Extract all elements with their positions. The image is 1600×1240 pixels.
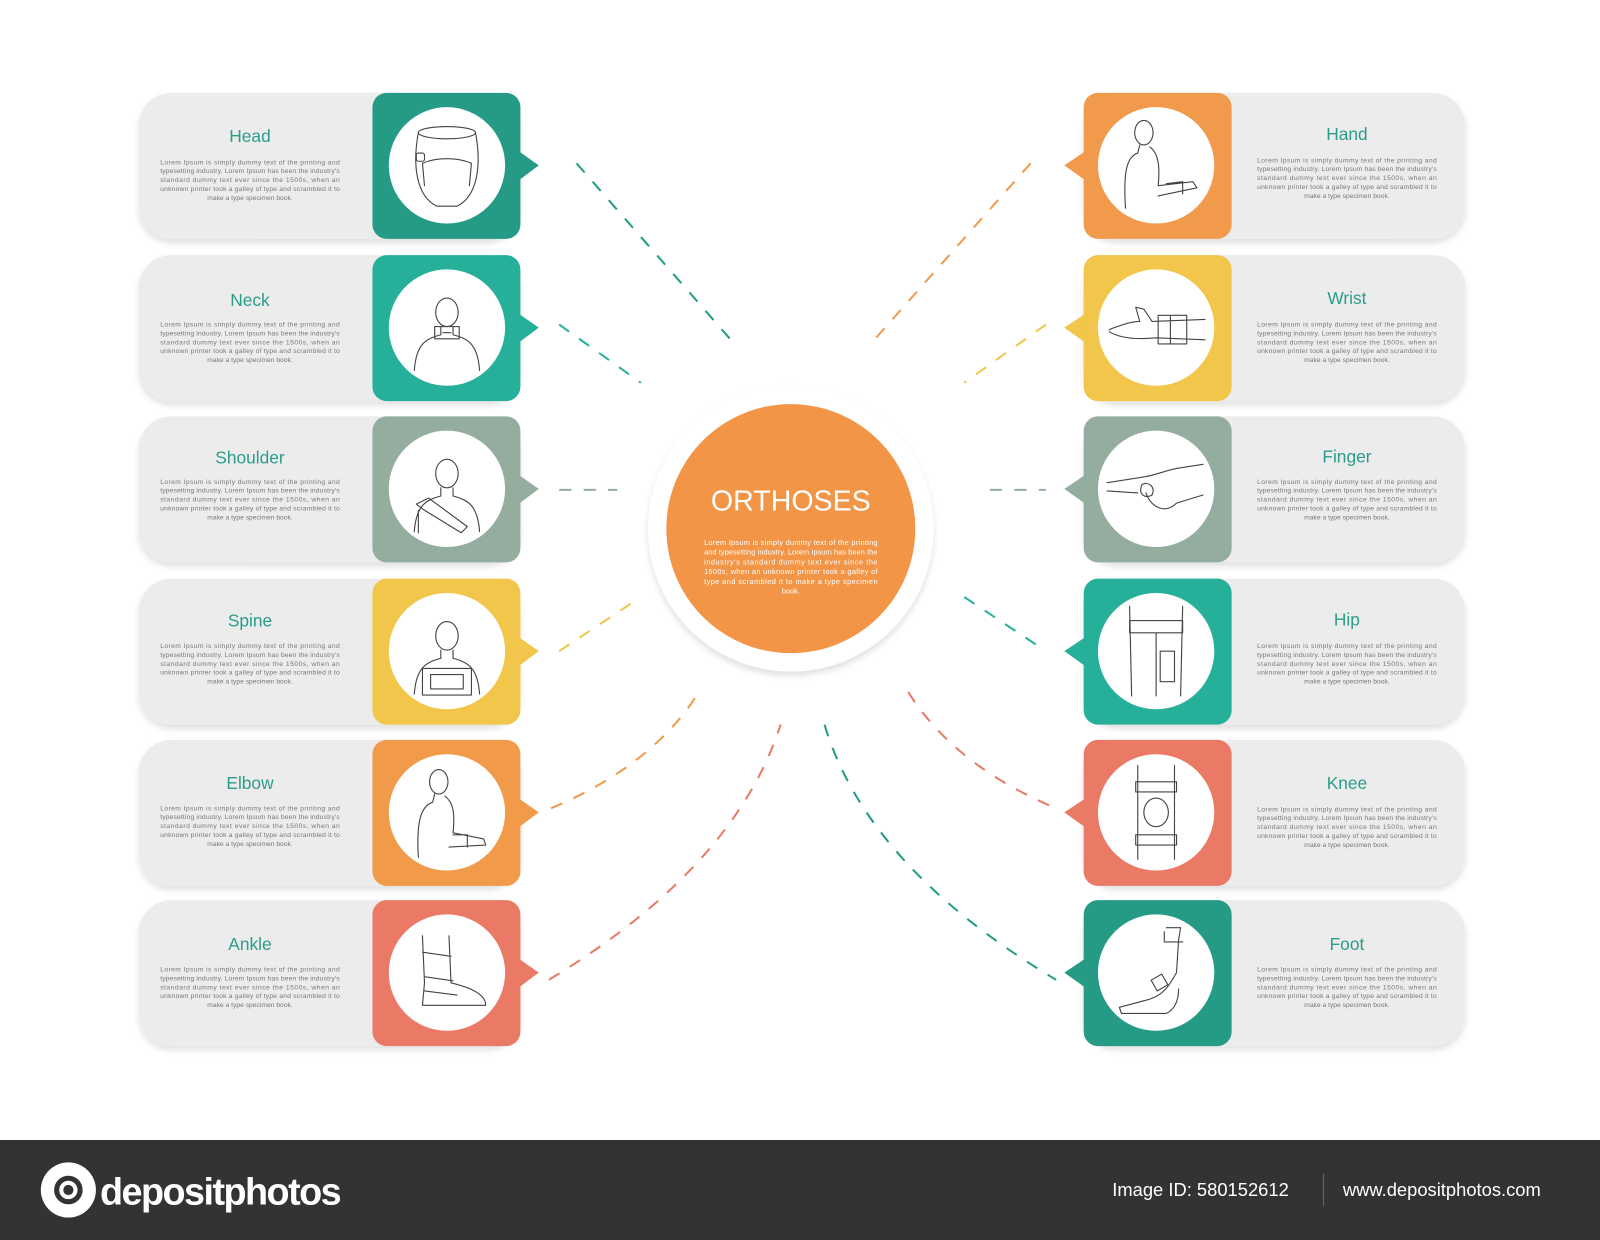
card: Shoulder (139, 416, 539, 562)
card: Wrist (1064, 255, 1465, 401)
card: Spine: Spine (228, 611, 272, 631)
center circle: ORTHOSES: book. (782, 586, 800, 595)
card: Elbow: Elbow (226, 773, 274, 793)
dashed connector lines (549, 163, 1056, 980)
card: Spine (139, 579, 539, 725)
center circle: ORTHOSES: ORTHOSES (711, 485, 871, 517)
card: Hip: Hip (1334, 610, 1360, 630)
card: Head (139, 93, 539, 239)
card: Finger: Finger (1322, 446, 1372, 466)
card: Knee (1064, 740, 1465, 886)
card: Ankle (139, 900, 539, 1046)
footer url: www.depositphotos.com (1342, 1179, 1541, 1200)
card: Hand: Hand (1326, 124, 1368, 144)
card: Ankle: Ankle (228, 934, 272, 954)
card: Hand (1064, 93, 1465, 239)
card: Elbow (139, 740, 539, 886)
footer logo: depositphotos (100, 1170, 341, 1212)
card: Hip (1064, 579, 1465, 725)
card: Finger (1064, 416, 1465, 562)
center circle: ORTHOSES (648, 386, 934, 672)
center circle: ORTHOSES: and typesetting industry. Lorem Ipsum has been the (704, 548, 878, 557)
center circle: ORTHOSES: type and scrambled it to make a type specimen (704, 577, 878, 586)
card: Neck: Neck (230, 290, 270, 310)
footer bar (0, 1140, 1600, 1240)
card: Shoulder: Shoulder (215, 447, 285, 467)
card: Foot: Foot (1330, 934, 1364, 954)
center circle: ORTHOSES: industry's standard dummy text ever since the (704, 557, 878, 566)
center circle: ORTHOSES: 1500s, when an unknown printer took a galley of (704, 567, 879, 576)
card: Foot (1064, 900, 1465, 1046)
card: Neck (139, 255, 539, 401)
center circle: ORTHOSES: Lorem Ipsum is simply dummy text of the printing (704, 538, 878, 547)
card: Wrist: Wrist (1327, 288, 1367, 308)
card: Head: Head (229, 126, 271, 146)
footer logo (41, 1162, 341, 1218)
footer image id: Image ID: 580152612 (1112, 1179, 1289, 1200)
card: Knee: Knee (1327, 773, 1367, 793)
